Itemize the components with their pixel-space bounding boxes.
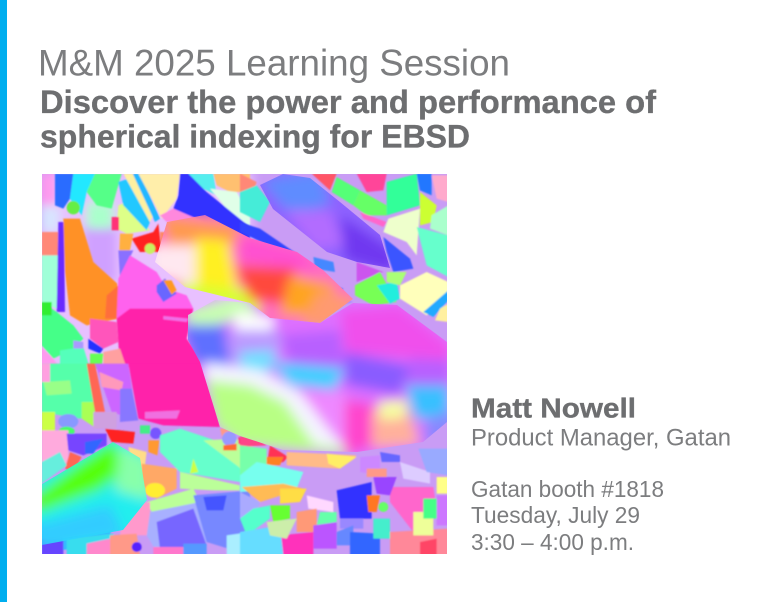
smooth grain: violet diagonal	[260, 174, 390, 268]
speaker role: Product Manager, Gatan	[471, 424, 731, 452]
event details: Gatan booth #1818	[471, 476, 664, 502]
event details: Tuesday, July 29	[471, 502, 640, 528]
subtitle: Discover the power and performance of	[40, 84, 656, 120]
title: M&M 2025 Learning Session	[38, 42, 510, 84]
smooth grain: orange yellow pink	[155, 215, 353, 323]
map quadrant: bottom left	[42, 364, 250, 555]
map quadrant: bottom right	[240, 436, 448, 555]
map quadrant: top right	[240, 174, 448, 322]
map quadrant: top left	[40, 172, 253, 369]
smooth grain: green lower left	[42, 442, 147, 545]
subtitle	[40, 84, 656, 154]
event details	[471, 476, 664, 555]
accent bar	[0, 0, 7, 602]
smooth grain: large lower deformed grain	[188, 300, 447, 452]
event details: 3:30 – 4:00 p.m.	[471, 529, 634, 555]
EBSD orientation map image	[42, 174, 447, 554]
subtitle: spherical indexing for EBSD	[40, 118, 470, 154]
speaker name: Matt Nowell	[471, 392, 636, 424]
